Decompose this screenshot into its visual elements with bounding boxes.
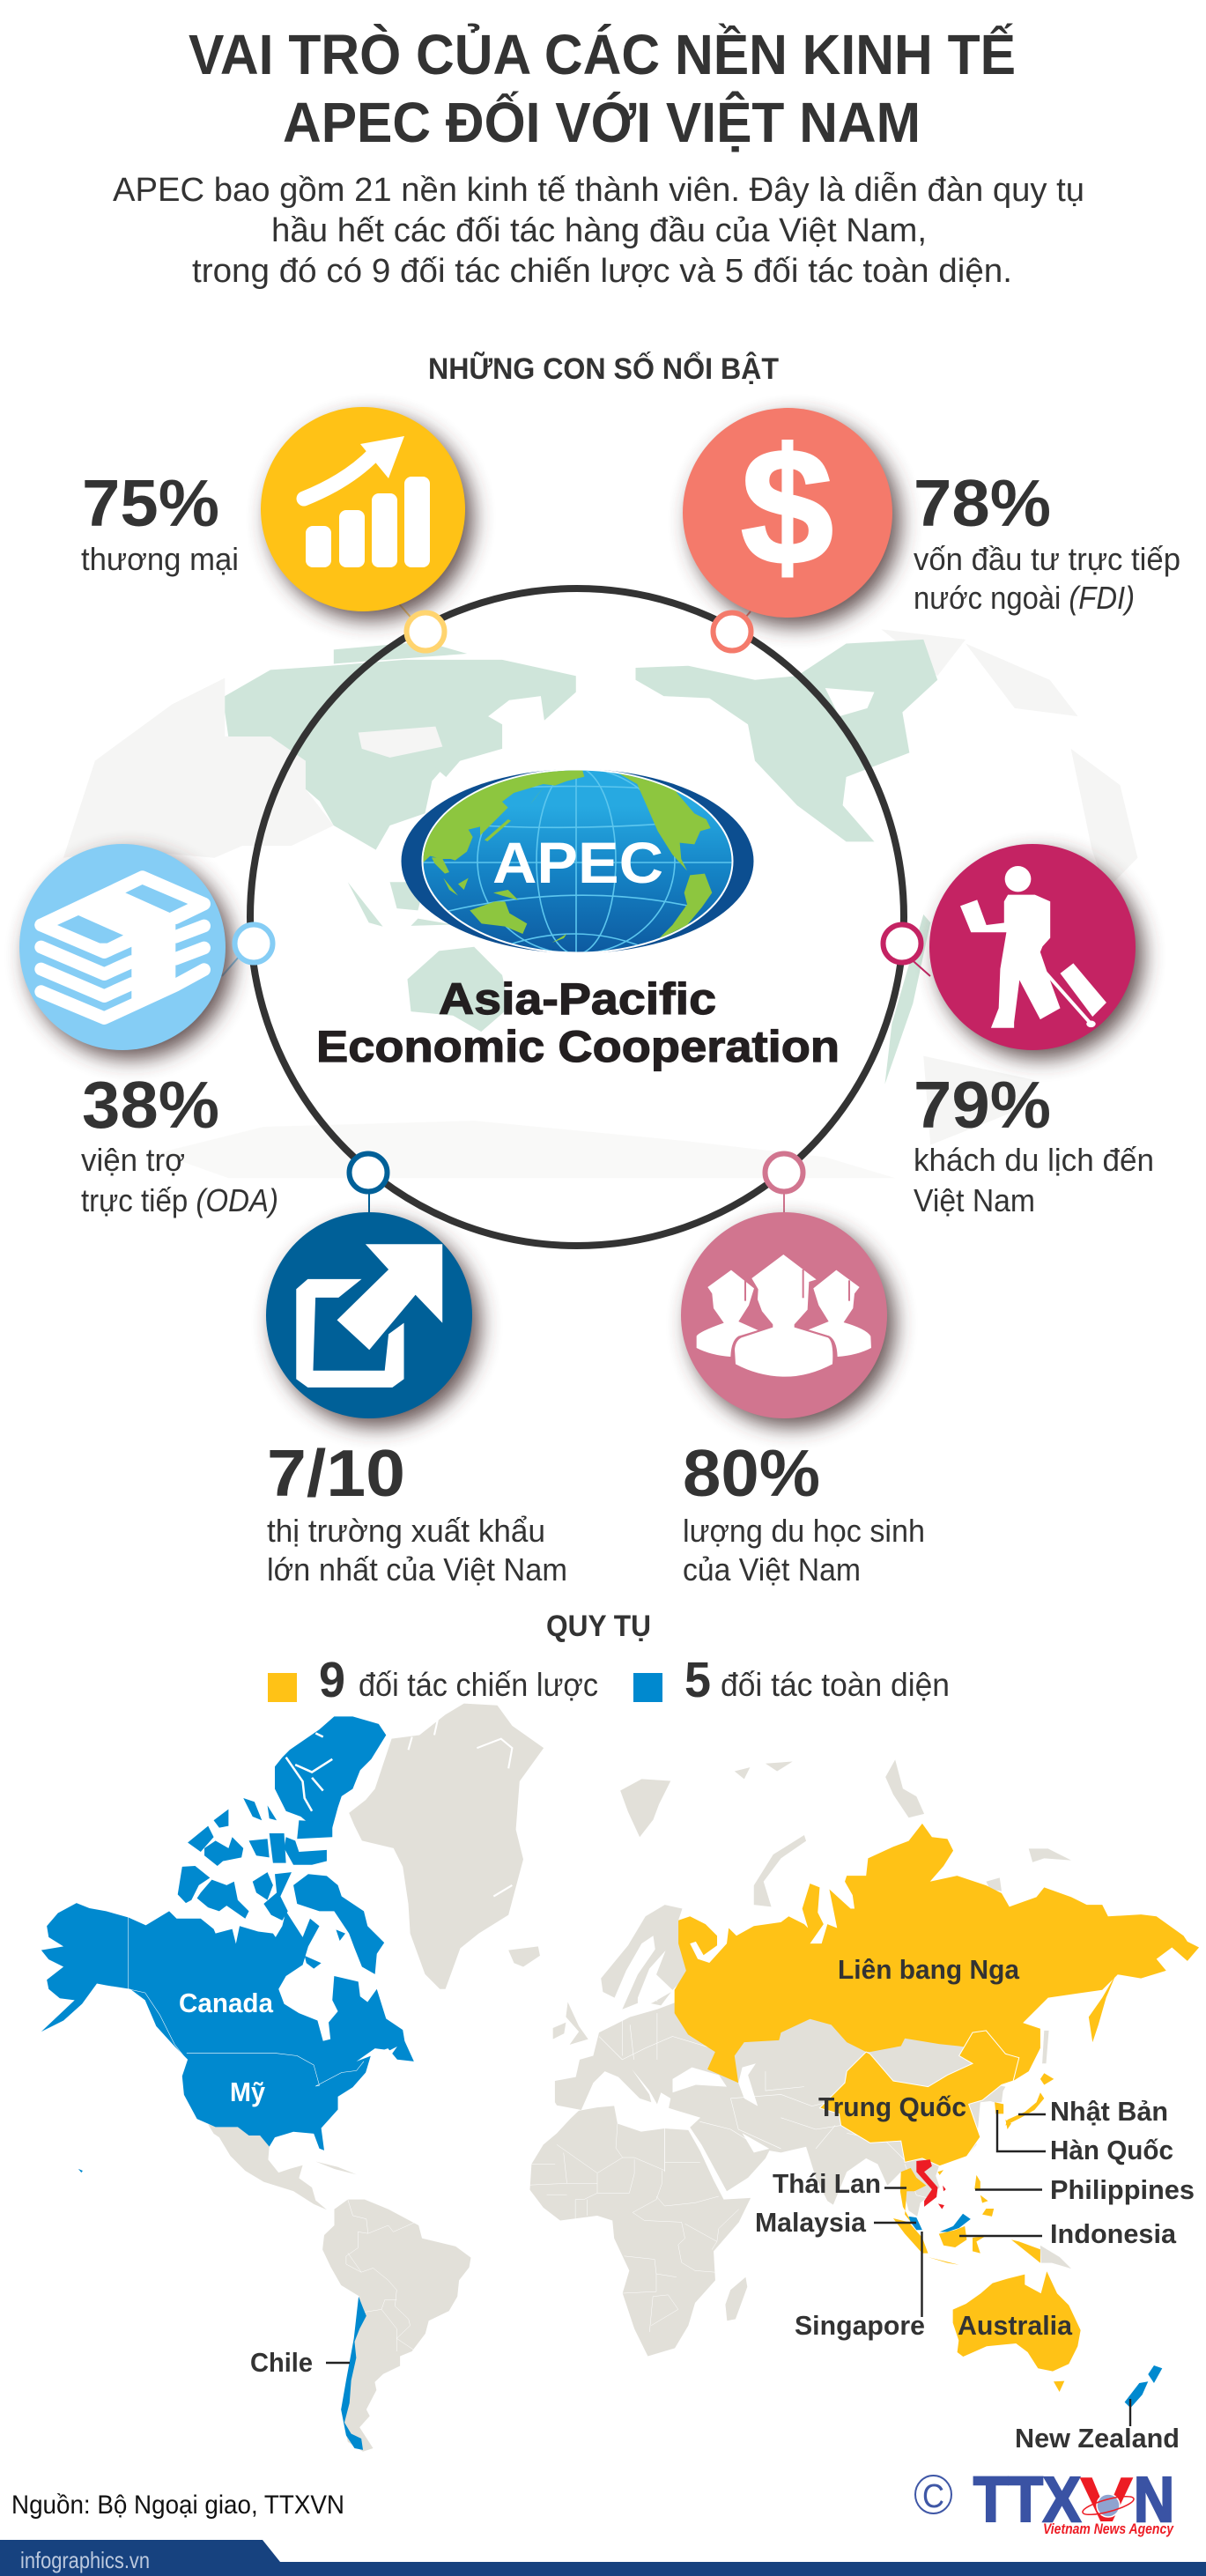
icon: traveller	[960, 866, 1106, 1028]
export value: 7/10	[267, 1436, 405, 1510]
TTXVN logo: Vietnam News Agency	[1043, 2520, 1174, 2537]
map labels: Chile	[250, 2347, 313, 2378]
APEC name: Economic Cooperation	[316, 1022, 840, 1071]
ODA label	[81, 1142, 278, 1218]
title: VAI TRÒ CỦA CÁC NỀN KINH TẾ	[189, 22, 1016, 86]
connector dot	[234, 925, 273, 962]
icon: rising bars	[304, 436, 430, 567]
map labels: Liên bang Nga	[838, 1954, 1020, 1985]
legend: strategic partners	[268, 1652, 598, 1708]
map labels: Indonesia	[1050, 2218, 1177, 2249]
icon: stacked books	[41, 877, 204, 1018]
map labels: Philippines	[1050, 2174, 1195, 2205]
heading: partners: QUY TỤ	[546, 1610, 651, 1643]
connector dot	[407, 613, 444, 650]
legend: comprehensive partners: 5	[684, 1652, 711, 1708]
export label	[267, 1513, 567, 1588]
map: Australia and New Zealand	[953, 2271, 1162, 2408]
map labels: Mỹ	[230, 2076, 266, 2107]
intro text: hầu hết các đối tác hàng đầu của Việt Nam,	[271, 212, 927, 249]
legend: comprehensive partners	[633, 1652, 950, 1708]
FDI circle	[683, 408, 892, 618]
title	[189, 22, 1016, 154]
connector dot	[714, 613, 751, 650]
intro text: trong đó có 9 đối tác chiến lược và 5 đối tác toàn diện.	[192, 253, 1012, 290]
map: China	[819, 2031, 1019, 2166]
students label	[683, 1513, 925, 1588]
FDI label	[914, 541, 1180, 616]
map: Canada and USA	[41, 1716, 414, 2173]
ODA value: 38%	[82, 1068, 219, 1142]
students circle	[681, 1212, 887, 1418]
map labels: Canada	[179, 1988, 274, 2018]
map labels: Australia	[958, 2310, 1073, 2341]
title: APEC ĐỐI VỚI VIỆT NAM	[283, 90, 921, 154]
map labels: Singapore	[795, 2310, 925, 2341]
map labels: Nhật Bản	[1050, 2096, 1168, 2127]
FDI label: vốn đầu tư trực tiếp	[914, 541, 1180, 577]
map: Eurasia	[555, 1759, 1199, 2269]
export label: lớn nhất của Việt Nam	[267, 1551, 567, 1588]
panel: students stat	[681, 1154, 925, 1588]
ODA circle	[19, 844, 226, 1050]
panel: trade stat	[81, 407, 465, 650]
map: Japan and South Korea	[995, 2073, 1054, 2129]
TTXVN logo: TTX	[973, 2465, 1081, 2535]
ODA label: viện trợ	[81, 1142, 185, 1178]
export label: thị trường xuất khẩu	[267, 1513, 545, 1549]
trade circle	[261, 407, 465, 611]
map labels: New Zealand	[1015, 2423, 1180, 2454]
students value: 80%	[683, 1436, 820, 1510]
ODA label: trực tiếp (ODA)	[81, 1182, 278, 1218]
panel: FDI stat	[683, 408, 1180, 650]
tourism circle	[929, 844, 1136, 1050]
map: Southeast Asia	[893, 2168, 1040, 2265]
trade label: thương mại	[81, 541, 239, 577]
heading: key figures: NHỮNG CON SỐ NỔI BẬT	[428, 352, 779, 386]
map: Russia	[675, 1824, 1199, 2083]
map: Greenland, Iceland, Central America	[208, 1704, 588, 2210]
FDI label: nước ngoài (FDI)	[914, 580, 1135, 616]
TTXVN logo: V	[1079, 2465, 1134, 2535]
intro text: APEC bao gồm 21 nền kinh tế thành viên. Đây là diễn đàn quy tụ	[113, 171, 1084, 209]
partner world map	[41, 1704, 1199, 2454]
icon: graduates	[697, 1255, 871, 1377]
intro text	[113, 171, 1084, 290]
map labels: Hàn Quốc	[1050, 2135, 1173, 2165]
tourism value: 79%	[914, 1068, 1051, 1142]
panel: export stat	[266, 1154, 567, 1588]
legend: comprehensive partners: đối tác toàn diện	[721, 1667, 950, 1703]
map labels: Malaysia	[755, 2207, 867, 2238]
map: South America and Africa	[322, 2106, 751, 2452]
TTXVN logo: C	[922, 2478, 944, 2515]
map labels: Trung Quốc	[818, 2091, 966, 2122]
TTXVN logo: N	[1134, 2465, 1174, 2535]
students label: lượng du học sinh	[683, 1513, 925, 1549]
FDI value: 78%	[914, 466, 1051, 540]
connector dot	[349, 1154, 388, 1191]
central ring	[250, 588, 904, 1246]
footer band: infographics.vn	[20, 2547, 150, 2573]
tourism label: khách du lịch đến	[914, 1142, 1154, 1178]
map labels: Thái Lan	[773, 2168, 881, 2199]
map labels	[179, 1954, 1195, 2454]
APEC logo	[402, 766, 754, 956]
source: Nguồn: Bộ Ngoại giao, TTXVN	[11, 2491, 344, 2520]
students label: của Việt Nam	[683, 1551, 861, 1588]
trade value: 75%	[82, 466, 219, 540]
map: Chile	[341, 2297, 366, 2450]
connector dot	[765, 1154, 803, 1191]
legend: strategic partners: 9	[319, 1652, 345, 1708]
panel: ODA stat	[19, 844, 278, 1218]
map: leader lines	[326, 2110, 1130, 2426]
TTXVN logo	[915, 2465, 1174, 2537]
tourism label: Việt Nam	[914, 1182, 1035, 1218]
legend: strategic partners: đối tác chiến lược	[359, 1667, 598, 1703]
tourism label	[914, 1142, 1154, 1218]
APEC name	[316, 974, 840, 1071]
background world map	[63, 629, 1137, 1178]
APEC logo: APEC	[492, 830, 663, 895]
icon: export arrow	[296, 1244, 442, 1388]
footer band	[0, 2540, 1206, 2576]
panel: tourism stat	[883, 844, 1154, 1218]
export circle	[266, 1212, 472, 1418]
APEC name: Asia-Pacific	[439, 974, 716, 1024]
connector dot	[883, 925, 921, 962]
icon: dollar: $	[741, 414, 833, 599]
